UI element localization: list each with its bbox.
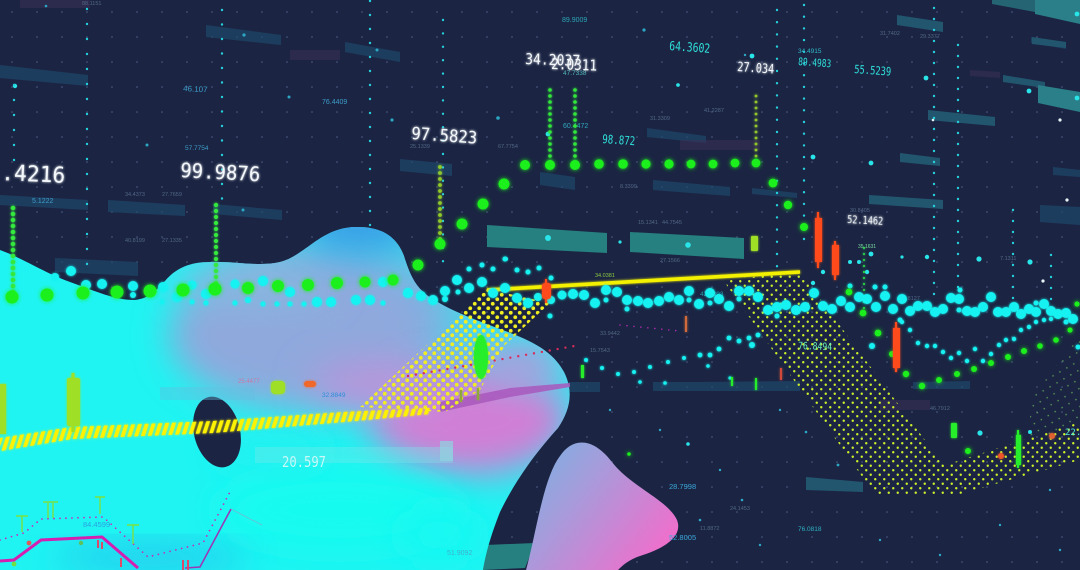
- faint numeric labels: 88.1151: [82, 1, 101, 7]
- cyan values: 55.5239: [854, 62, 892, 79]
- white particles: [932, 118, 1069, 283]
- faint numeric labels: 30.8405: [850, 208, 870, 214]
- white headline values: 27.034: [737, 60, 775, 78]
- white headline values: 2.0311: [551, 55, 597, 75]
- infographic canvas: 57.7754: [185, 145, 209, 152]
- faint labels on blob: 20.597: [282, 453, 326, 471]
- mid-chart values: 34.0381: [595, 273, 615, 279]
- faint numeric labels: 29.3377: [920, 34, 940, 40]
- faint numeric labels: 8.3399: [620, 184, 637, 190]
- dotted band: ascending: [873, 422, 1080, 496]
- faint numeric labels: 15.7543: [590, 348, 610, 354]
- faint numeric labels: 31.7402: [880, 31, 900, 37]
- blob hole: [186, 392, 248, 472]
- faint numeric labels: 33.9442: [600, 331, 620, 337]
- faint labels on blob: 84.4599: [83, 520, 110, 529]
- white headline values: 52.1462: [847, 213, 883, 228]
- cyan values: 98.872: [602, 132, 636, 148]
- faint labels on blob: [83, 379, 472, 557]
- infographic canvas: 76.4409: [322, 99, 347, 106]
- faint numeric labels: 27.7659: [162, 192, 182, 198]
- faint numeric labels: 24.1453: [730, 506, 750, 512]
- bottom-left mini chart: [0, 490, 262, 570]
- cyan values: 64.3602: [669, 38, 711, 56]
- infographic canvas: 76.0818: [798, 526, 822, 533]
- infographic canvas: 60.4472: [563, 123, 588, 130]
- green dotted stems: [13, 90, 864, 313]
- bright accent particles: [13, 12, 1079, 460]
- white headline values: 97.5823: [411, 124, 478, 149]
- faint numeric labels: 7.1311: [1000, 256, 1016, 262]
- faint numeric labels: 31.3309: [650, 116, 670, 122]
- infographic canvas: 5.1222: [32, 198, 54, 205]
- candlesticks: [0, 212, 1055, 468]
- white headline values: 34.2037: [525, 50, 580, 70]
- faint numeric labels: 25.1339: [410, 144, 430, 150]
- faint numeric labels: 46.7912: [930, 406, 950, 412]
- faint numeric labels: 41.2287: [704, 108, 724, 114]
- cyan values: [602, 38, 892, 148]
- infographic canvas: 42.1393: [700, 291, 724, 298]
- values beside lower blob: 52.8005: [669, 533, 696, 542]
- faint numeric labels: 15.1341: [638, 220, 658, 226]
- red dotted series: [408, 345, 580, 376]
- infographic canvas: 34.4915: [798, 48, 822, 55]
- pink hatched band: [440, 383, 570, 412]
- faint numeric labels: 27.1335: [162, 238, 182, 244]
- dotted band: descending: [723, 272, 945, 492]
- values beside lower blob: 28.7998: [669, 482, 696, 491]
- dotted backdrop band: right: [1030, 335, 1080, 440]
- yellow hatched trend line: [0, 408, 430, 451]
- faint numeric labels: 27.1566: [660, 258, 680, 264]
- faint labels on blob: 51.9092: [447, 550, 472, 557]
- mid-chart values: [595, 244, 1080, 438]
- white headline values: .4216: [1, 161, 66, 189]
- faint pink bars: [20, 0, 1000, 410]
- faint labels on blob: 25.4477: [238, 379, 260, 385]
- faint numeric labels: 24.8127: [900, 296, 920, 302]
- faint labels on blob: 32.8849: [322, 392, 346, 399]
- faint numeric labels: 11.8872: [700, 526, 719, 532]
- blob: main gradient shape: [0, 227, 570, 570]
- mid-chart values: 35.1631: [858, 244, 876, 250]
- blob: lower right shape: [526, 442, 678, 570]
- infographic canvas: 47.7338: [563, 70, 587, 77]
- white headline values: 99.9876: [180, 158, 261, 186]
- white headline values: [1, 50, 883, 228]
- cyan wave dots: [51, 256, 1080, 385]
- yellow trend line top: [487, 272, 800, 290]
- infographic canvas: 89.9009: [562, 17, 587, 24]
- faint numeric labels: 40.8199: [125, 238, 145, 244]
- dotted band: left yellow: [360, 289, 550, 412]
- cyan values: 89.4983: [798, 56, 832, 70]
- faint numeric labels: 34.4373: [125, 192, 145, 198]
- green line dots: [6, 159, 1080, 456]
- mid-chart values: 76.8494: [798, 341, 832, 353]
- cyan dotted verticals: [14, 1, 1051, 300]
- faint numeric labels: 44.7545: [662, 220, 682, 226]
- teal data bars: [487, 225, 607, 253]
- values beside lower blob: [669, 482, 696, 542]
- faint numeric labels: 67.7754: [498, 144, 518, 150]
- infographic canvas: 46.107: [183, 84, 208, 94]
